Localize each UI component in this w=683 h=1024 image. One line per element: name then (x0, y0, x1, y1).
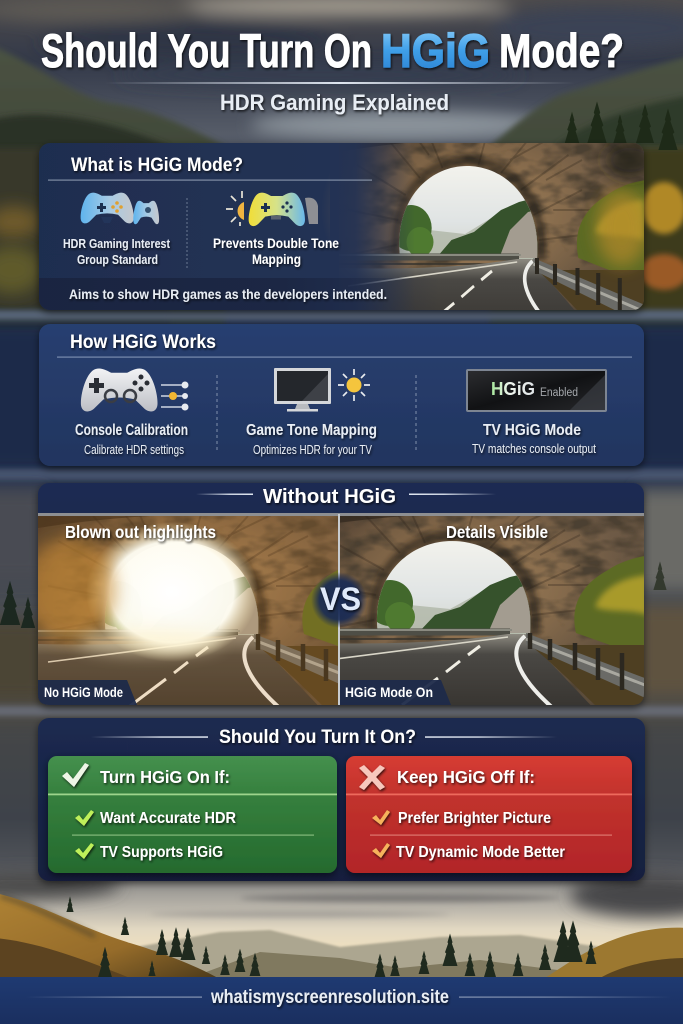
card: turn HGiG on (48, 756, 337, 873)
card: keep HGiG off: Keep HGiG Off If: (397, 767, 535, 787)
icon: HDR gaming controllers (81, 193, 159, 224)
card: turn HGiG on: TV Supports HGiG (100, 844, 223, 861)
title: Mode? (499, 24, 624, 77)
left hillside (0, 893, 218, 978)
footer (0, 977, 683, 1024)
icon: check (372, 843, 390, 858)
card: turn HGiG on: Turn HGiG On If: (100, 767, 230, 787)
right hillside (545, 928, 683, 978)
label: blown out highlights: Blown out highlights (65, 522, 216, 542)
icon: console controller with sliders (81, 368, 188, 411)
heading: How HGiG Works (70, 331, 216, 353)
distant hills (120, 930, 620, 978)
caption: Aims to show HDR games as the developers intended. (69, 286, 387, 302)
text: prevents double tone mapping (213, 236, 339, 267)
footer: whatismyscreenresolution.site (210, 987, 449, 1008)
text: console calibration (75, 422, 188, 457)
text: HDR gaming interest group (63, 236, 171, 267)
top clouds (0, 0, 683, 139)
conifer trees (66, 896, 596, 978)
text: prevents double tone mapping: Prevents Double Tone (213, 236, 339, 251)
icon: check (75, 843, 94, 859)
tag: no HGiG mode: No HGiG Mode (44, 685, 123, 700)
tag: no HGiG mode (38, 680, 137, 705)
icon: big X (359, 765, 385, 790)
text: game tone mapping: Optimizes HDR for your TV (253, 443, 373, 457)
heading: Without HGiG (263, 485, 396, 508)
panel: how HGiG works (39, 324, 644, 466)
card: keep HGiG off: TV Dynamic Mode Better (396, 844, 565, 861)
icon: HGiG enabled badge (466, 369, 607, 412)
icon: HGiG enabled badge: Enabled (540, 387, 578, 399)
icon: check (75, 810, 94, 826)
icon: check (372, 810, 390, 825)
text: game tone mapping: Game Tone Mapping (246, 422, 377, 439)
icon: big check (62, 763, 89, 787)
VS badge (311, 572, 367, 628)
label: details visible: Details Visible (446, 522, 548, 542)
mid side scenery (0, 490, 46, 580)
tag: HGiG mode on: HGiG Mode On (345, 685, 433, 700)
card: turn HGiG on: Want Accurate HDR (100, 810, 236, 827)
blue mist (0, 322, 683, 472)
text: prevents double tone mapping: Mapping (252, 252, 301, 267)
card: keep HGiG off: Prefer Brighter Picture (398, 810, 551, 827)
autumn forest left (0, 148, 44, 308)
text: game tone mapping (246, 422, 377, 457)
autumn forest right (636, 148, 683, 313)
title: HGiG (381, 24, 490, 77)
left and right mountains (0, 45, 225, 330)
heading: Should You Turn It On? (219, 727, 416, 748)
icon: monitor and sun (274, 368, 370, 412)
bottom sky (0, 880, 683, 978)
text: HDR gaming interest group: HDR Gaming Interest (63, 236, 171, 251)
icon: sun and controller (226, 191, 318, 226)
text: console calibration: Calibrate HDR settings (84, 443, 184, 457)
icon: HGiG enabled badge: HGiG (491, 379, 535, 399)
text: TV HGiG mode: TV HGiG Mode (483, 422, 581, 439)
tunnel photo (39, 143, 644, 310)
panel: should you turn it on (38, 718, 645, 881)
subtitle: HDR Gaming Explained (220, 90, 449, 115)
card: keep HGiG off (346, 756, 632, 873)
text: HDR gaming interest group: Group Standard (77, 252, 158, 267)
text: console calibration: Console Calibration (75, 422, 188, 439)
panel: without HGiG comparison (34, 482, 648, 712)
title: Should You Turn On (41, 24, 372, 77)
heading: What is HGiG Mode? (71, 154, 243, 176)
tag: HGiG mode on (340, 680, 451, 705)
photo: no HGiG blown out (38, 516, 338, 705)
text: TV HGiG mode (472, 422, 596, 456)
text: TV HGiG mode: TV matches console output (472, 442, 596, 456)
panel: what is HGiG mode (36, 142, 649, 317)
VS badge: VS (320, 581, 361, 617)
photo: HGiG on details visible (340, 516, 644, 705)
